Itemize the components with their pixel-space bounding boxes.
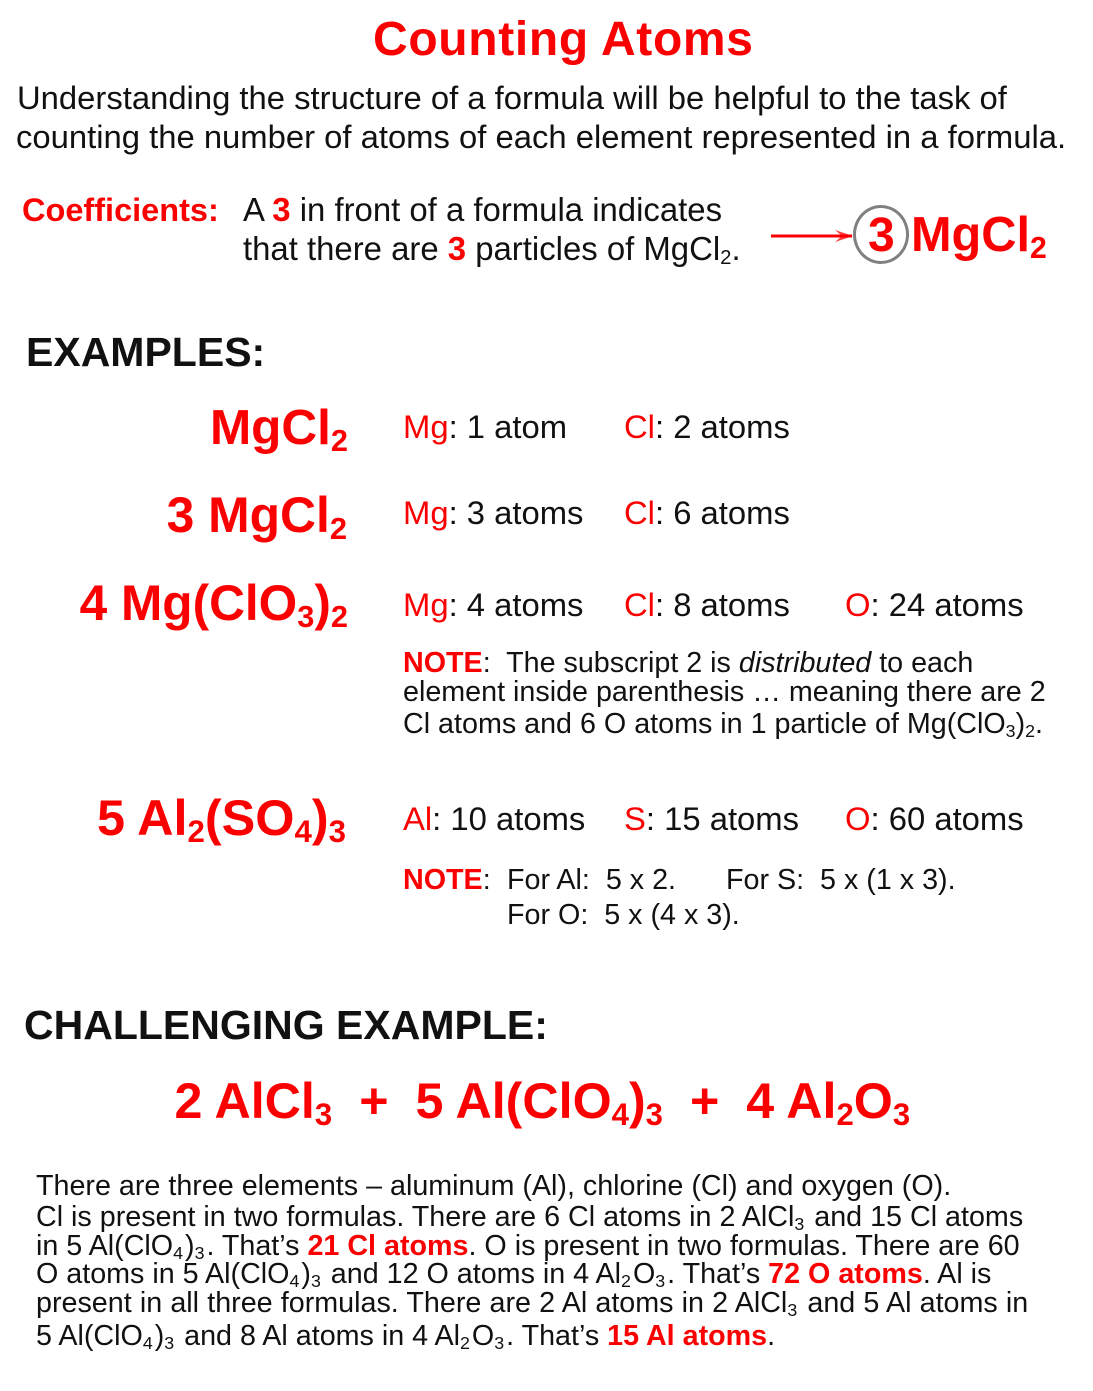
heading: challenging example: CHALLENGING EXAMPLE: <box>24 1002 548 1048</box>
example 4 formula: 5 Al2(SO4)3 <box>97 789 346 849</box>
coefficient 3: 3 <box>868 209 895 262</box>
example 1 counts <box>403 408 790 445</box>
formula: MgCl2 <box>911 208 1047 265</box>
example 3 counts: Cl: 8 atoms <box>624 586 790 623</box>
example 3 formula: 4 Mg(ClO3)2 <box>80 575 348 634</box>
note: multiplication: For Al: 5 x 2. <box>507 864 676 896</box>
note: distributed subscript: NOTE: The subscript 2 is distributed to each <box>403 647 973 679</box>
note: distributed subscript <box>403 647 1046 741</box>
explanation paragraph: There are three elements – aluminum (Al), chlorine (Cl) and oxygen (O). <box>36 1170 951 1202</box>
coefficients explanation: that there are 3 particles of MgCl2. <box>243 230 741 269</box>
example 4 counts <box>403 800 1024 837</box>
example 1 formula: MgCl2 <box>210 400 348 458</box>
title: Counting Atoms <box>373 13 754 66</box>
explanation paragraph: present in all three formulas. There are 2 Al atoms in 2 AlCl3 and 5 Al atoms in <box>36 1287 1028 1320</box>
note: distributed subscript: element inside parenthesis … meaning there are 2 <box>403 676 1046 708</box>
coefficients explanation: A 3 in front of a formula indicates <box>243 191 722 228</box>
intro text: counting the number of atoms of each element represented in a formula. <box>16 118 1066 155</box>
explanation paragraph: Cl is present in two formulas. There are 6 Cl atoms in 2 AlCl3 and 15 Cl atoms <box>36 1201 1023 1234</box>
arrow <box>771 230 853 242</box>
heading: examples: EXAMPLES: <box>26 329 265 375</box>
example 3 counts: Mg: 4 atoms <box>403 586 583 623</box>
challenging equation: 2 AlCl3 + 5 Al(ClO4)3 + 4 Al2O3 <box>174 1073 910 1132</box>
example 1 counts: Mg: 1 atom <box>403 408 567 445</box>
example 2 counts: Cl: 6 atoms <box>624 494 790 531</box>
example 1 counts: Cl: 2 atoms <box>624 408 790 445</box>
intro text <box>16 79 1066 155</box>
circle <box>853 205 909 264</box>
note: multiplication <box>403 864 956 931</box>
example 4 counts: Al: 10 atoms <box>403 800 585 837</box>
intro text: Understanding the structure of a formula will be helpful to the task of <box>17 79 1007 116</box>
example 3 counts <box>403 586 1024 623</box>
example 4 counts: S: 15 atoms <box>624 800 799 837</box>
example 2 counts <box>403 494 790 531</box>
coefficients explanation <box>243 191 741 269</box>
note: multiplication: For S: 5 x (1 x 3). <box>726 864 956 896</box>
circled coefficient formula <box>853 205 1047 265</box>
example 2 formula: 3 MgCl2 <box>167 487 347 546</box>
coefficients label: Coefficients: <box>22 192 219 228</box>
explanation paragraph <box>36 1170 1028 1353</box>
example 2 counts: Mg: 3 atoms <box>403 494 583 531</box>
note: multiplication: NOTE: <box>403 864 491 896</box>
explanation paragraph: 5 Al(ClO4)3 and 8 Al atoms in 4 Al2O3. That’s 15 Al atoms. <box>36 1320 775 1353</box>
note: distributed subscript: Cl atoms and 6 O atoms in 1 particle of Mg(ClO3)2. <box>403 708 1043 741</box>
example 3 counts: O: 24 atoms <box>845 586 1024 623</box>
explanation paragraph: O atoms in 5 Al(ClO4)3 and 12 O atoms in 4 Al2O3. That’s 72 O atoms. Al is <box>36 1258 991 1291</box>
example 4 counts: O: 60 atoms <box>845 800 1024 837</box>
explanation paragraph: in 5 Al(ClO4)3. That’s 21 Cl atoms. O is present in two formulas. There are 60 <box>36 1230 1020 1263</box>
note: multiplication: For O: 5 x (4 x 3). <box>507 899 740 931</box>
